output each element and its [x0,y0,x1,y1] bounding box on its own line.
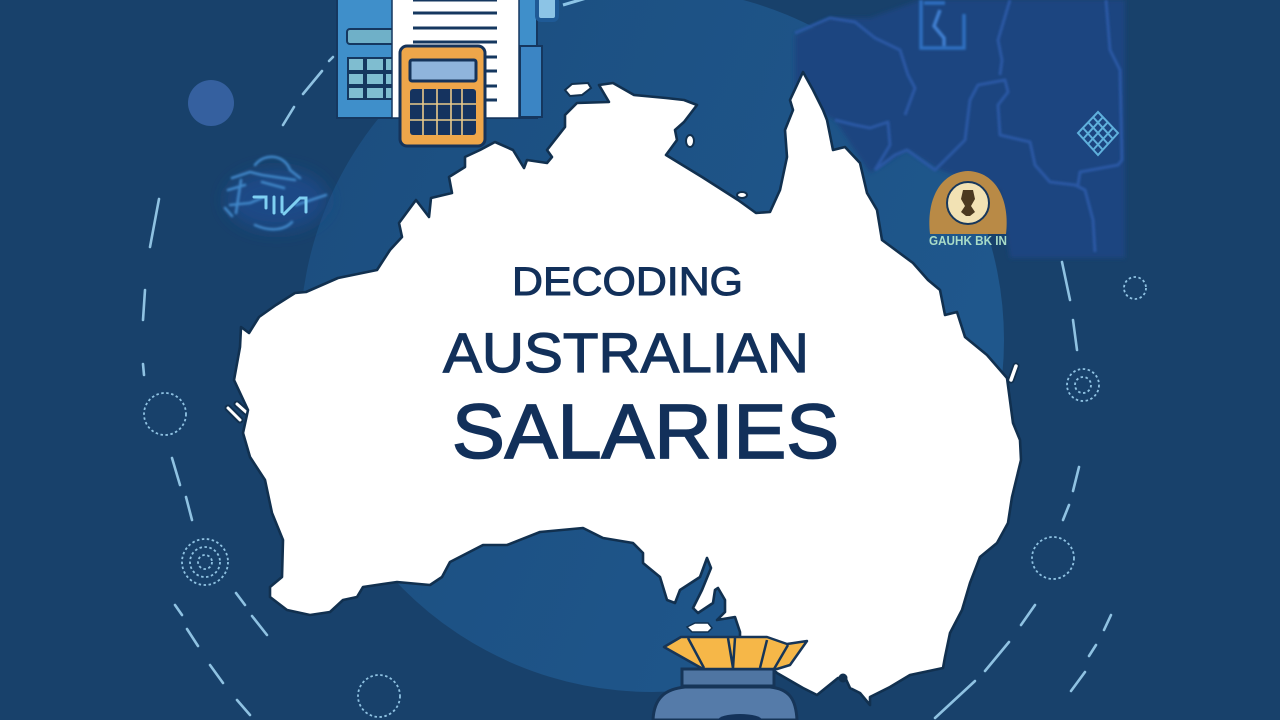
title line: Salaries: SALARIES [452,389,839,475]
icon: diamond grid [1078,112,1118,155]
west coast islets [228,404,246,420]
decorative dotted circles [144,277,1146,717]
Fraser island [1011,366,1016,380]
gold tie ruffle [664,637,807,669]
map of Australia [228,72,1021,705]
faint state map panel [795,0,1125,258]
folder right tab [520,46,542,117]
Groote Eylandt [737,192,747,198]
icon: document and office stack [337,0,590,118]
icon: orange calculator [400,46,485,146]
icon: road sign outline [921,0,964,48]
Melville island [565,83,591,96]
Fraser island highlight [1011,366,1016,380]
Kangaroo island [687,623,712,632]
background disc [300,0,1004,692]
bag neck [682,669,774,686]
Bass strait islet [838,674,848,682]
bag body [653,687,797,720]
paper lines [413,0,497,100]
icon: money bag [653,637,807,720]
seal label: GAUHK BK IN [929,233,1007,248]
bag opening dark [718,714,762,720]
Gulf islet [686,135,694,147]
blue folder [337,0,537,118]
keypad [348,58,401,99]
mainland outline [234,72,1021,705]
paper sheet [392,0,519,118]
solid blue dot [188,80,234,126]
title line: Decoding: DECODING [512,260,743,304]
dashed orbit ring [143,57,1111,718]
small form field [347,29,401,44]
icon: glowing scribble logo [225,157,327,230]
title [443,260,839,475]
seal emblem [961,190,975,216]
clip icon [537,0,557,20]
calculator keys [410,89,476,135]
icon: gold seal badge [929,171,1007,248]
title line: Australian: AUSTRALIAN [443,321,809,384]
calculator display [410,60,476,81]
